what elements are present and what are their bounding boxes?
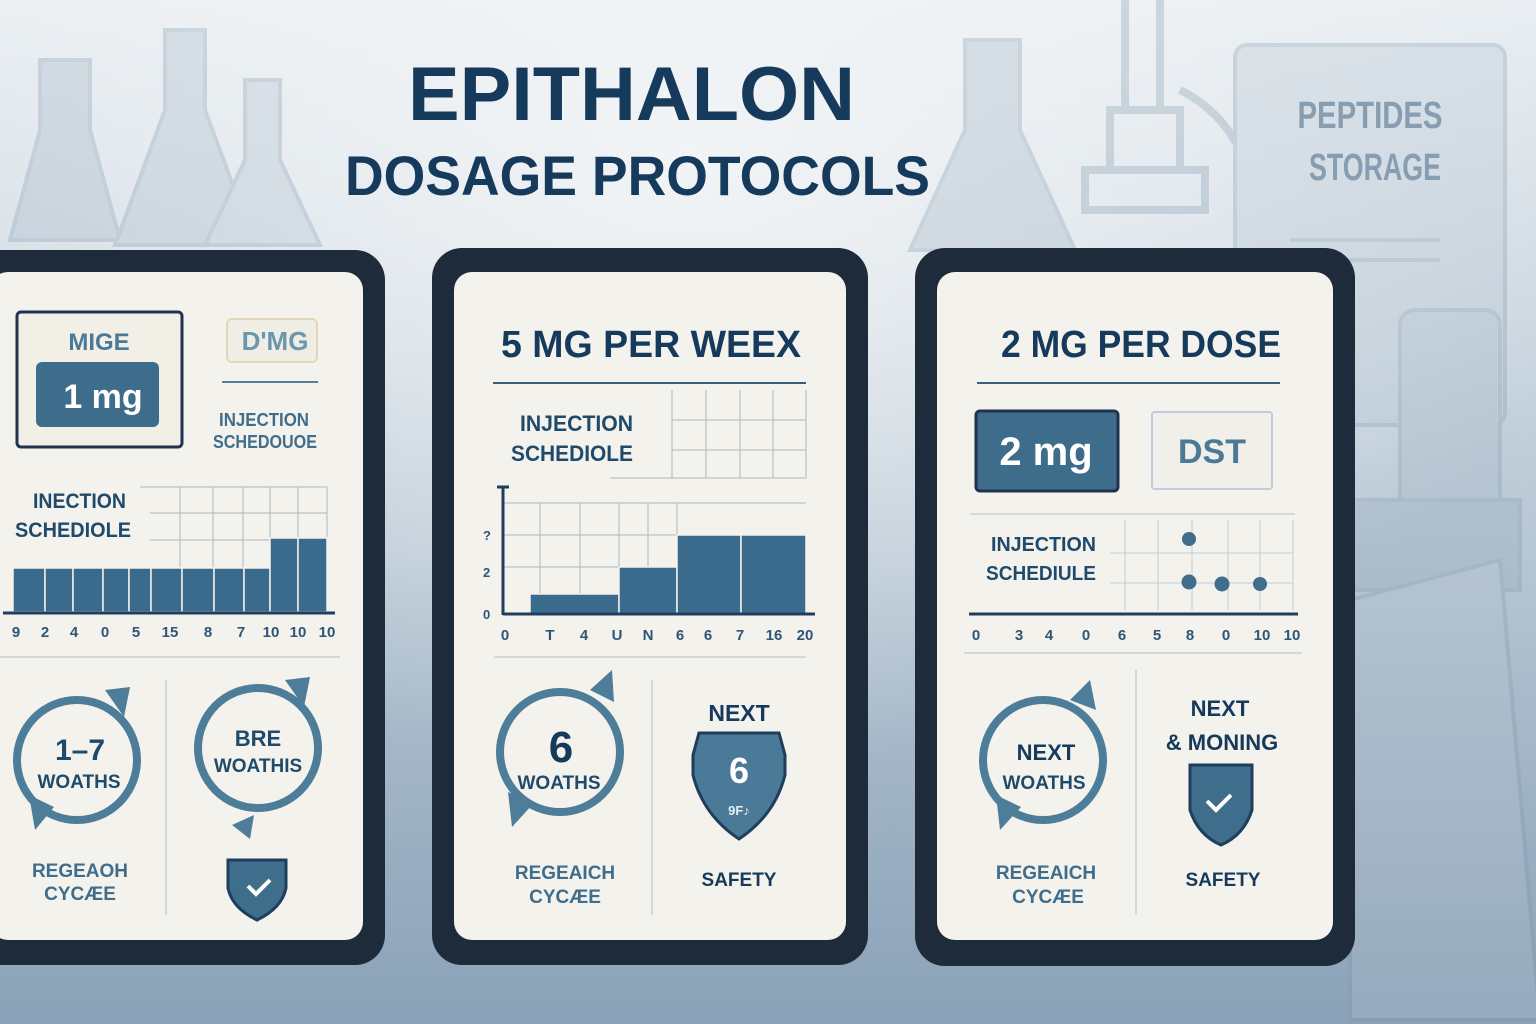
dose box 2mg: 2 mg	[999, 430, 1093, 474]
bar chart 2: N	[643, 627, 653, 644]
panel: tablet 3	[915, 248, 1355, 966]
heading: 2 MG PER DOSE	[1001, 324, 1281, 366]
dot chart: 6	[1118, 627, 1126, 644]
label DST: DST	[1178, 433, 1246, 471]
panel: tablet 3: NEXT	[1191, 696, 1250, 721]
dot chart: 10	[1254, 627, 1270, 644]
icon: cycle 1-7: 1–7	[55, 734, 105, 767]
dot chart	[969, 520, 1300, 644]
dose card 1mg	[17, 312, 182, 447]
icon: cycle 1-7: WOATHS	[37, 772, 121, 793]
bar chart 1: 7	[237, 624, 245, 641]
panel: tablet 2	[432, 248, 868, 965]
dot chart: INJECTION	[991, 534, 1096, 556]
icon: shield check	[1190, 765, 1252, 845]
bar chart 2: 0	[483, 607, 490, 622]
icon: cycle BRE: WOATHIS	[214, 756, 302, 777]
icon: cycle next: WOATHS	[1002, 773, 1086, 794]
bar chart 1: 8	[204, 624, 212, 641]
icon: shield 6	[693, 733, 785, 839]
label DST	[1152, 412, 1272, 489]
icon: shield 6: 9F♪	[728, 803, 750, 818]
dot chart: 0	[972, 627, 980, 644]
bar chart 2: 20	[797, 627, 813, 644]
dot chart: 10	[1284, 627, 1300, 644]
dot chart: 0	[1082, 627, 1090, 644]
heading: 5 MG PER WEEX	[501, 324, 802, 366]
label D'MG	[227, 319, 317, 362]
dose box 2mg	[976, 411, 1118, 491]
panel: tablet 1	[0, 250, 385, 965]
background book label: PEPTIDES	[1298, 95, 1442, 137]
background book label: STORAGE	[1309, 147, 1441, 189]
panel: tablet 3: CYCÆE	[1012, 887, 1084, 908]
injection schedule label: SCHEDOUOE	[213, 432, 317, 452]
background book label	[1298, 95, 1442, 189]
dot chart: 3	[1015, 627, 1023, 644]
bar chart 2: 0	[501, 627, 509, 644]
title: DOSAGE PROTOCOLS	[345, 144, 930, 207]
bar chart 1: 5	[132, 624, 140, 641]
bar chart 2: 6	[704, 627, 712, 644]
panel: tablet 1: REGEAOH	[32, 861, 128, 882]
bar chart 2: U	[612, 627, 622, 644]
panel: tablet 2: REGEAICH	[515, 863, 615, 884]
bar chart 1	[3, 487, 335, 641]
dot chart: 4	[1045, 627, 1054, 644]
icon: cycle BRE	[198, 677, 318, 839]
bar chart 2: 2	[483, 565, 490, 580]
bar chart 2: 16	[766, 627, 782, 644]
dot chart: 8	[1186, 627, 1194, 644]
bar chart 1: 10	[263, 624, 279, 641]
icon: cycle 6: 6	[549, 723, 573, 772]
label D'MG: D'MG	[242, 326, 308, 356]
bar chart 1: 10	[290, 624, 306, 641]
bar chart 1: 10	[319, 624, 335, 641]
title	[345, 52, 930, 207]
icon: cycle BRE: BRE	[235, 726, 281, 751]
bar chart 1: INECTION	[33, 490, 126, 513]
bar chart 1: 2	[41, 624, 49, 641]
icon: cycle 6	[500, 670, 620, 827]
panel: tablet 2: INJECTION	[520, 411, 633, 436]
title: EPITHALON	[408, 52, 855, 137]
dose card 1mg: 1 mg	[63, 378, 143, 416]
panel: tablet 3: REGEAICH	[996, 863, 1096, 884]
panel: tablet 1: CYCÆE	[44, 884, 116, 905]
bar chart 1: 9	[12, 624, 20, 641]
bar chart 1: 4	[70, 624, 79, 641]
bar chart 2: T	[545, 627, 555, 644]
dot chart: SCHEDIULE	[986, 563, 1096, 585]
icon: cycle 6: WOATHS	[517, 773, 601, 794]
dot chart: 5	[1153, 627, 1161, 644]
panel: tablet 2: CYCÆE	[529, 887, 601, 908]
icon: cycle 1-7	[17, 687, 137, 830]
dose card 1mg: MIGE	[68, 329, 130, 356]
bar chart 1: SCHEDIOLE	[15, 519, 131, 542]
bar chart 2: 6	[676, 627, 684, 644]
injection schedule label	[213, 410, 317, 452]
dot chart: 0	[1222, 627, 1230, 644]
icon: shield	[228, 860, 286, 920]
icon: shield 6: 6	[729, 750, 749, 791]
icon: cycle next	[983, 680, 1103, 830]
bar chart 2: 7	[736, 627, 744, 644]
panel: tablet 2: SCHEDIOLE	[511, 441, 633, 466]
icon: cycle next: NEXT	[1017, 740, 1076, 765]
panel: tablet 2: NEXT	[708, 700, 770, 726]
bar chart 2: ?	[483, 528, 491, 543]
bar chart 1: 0	[101, 624, 109, 641]
bar chart 1: 15	[162, 624, 178, 641]
panel: tablet 3: & MONING	[1166, 730, 1278, 755]
bar chart 2: 4	[580, 627, 589, 644]
panel: tablet 2: SAFETY	[702, 870, 777, 891]
panel: tablet 3: SAFETY	[1186, 870, 1261, 891]
injection schedule label: INJECTION	[219, 410, 309, 430]
bar chart 2	[483, 487, 815, 644]
